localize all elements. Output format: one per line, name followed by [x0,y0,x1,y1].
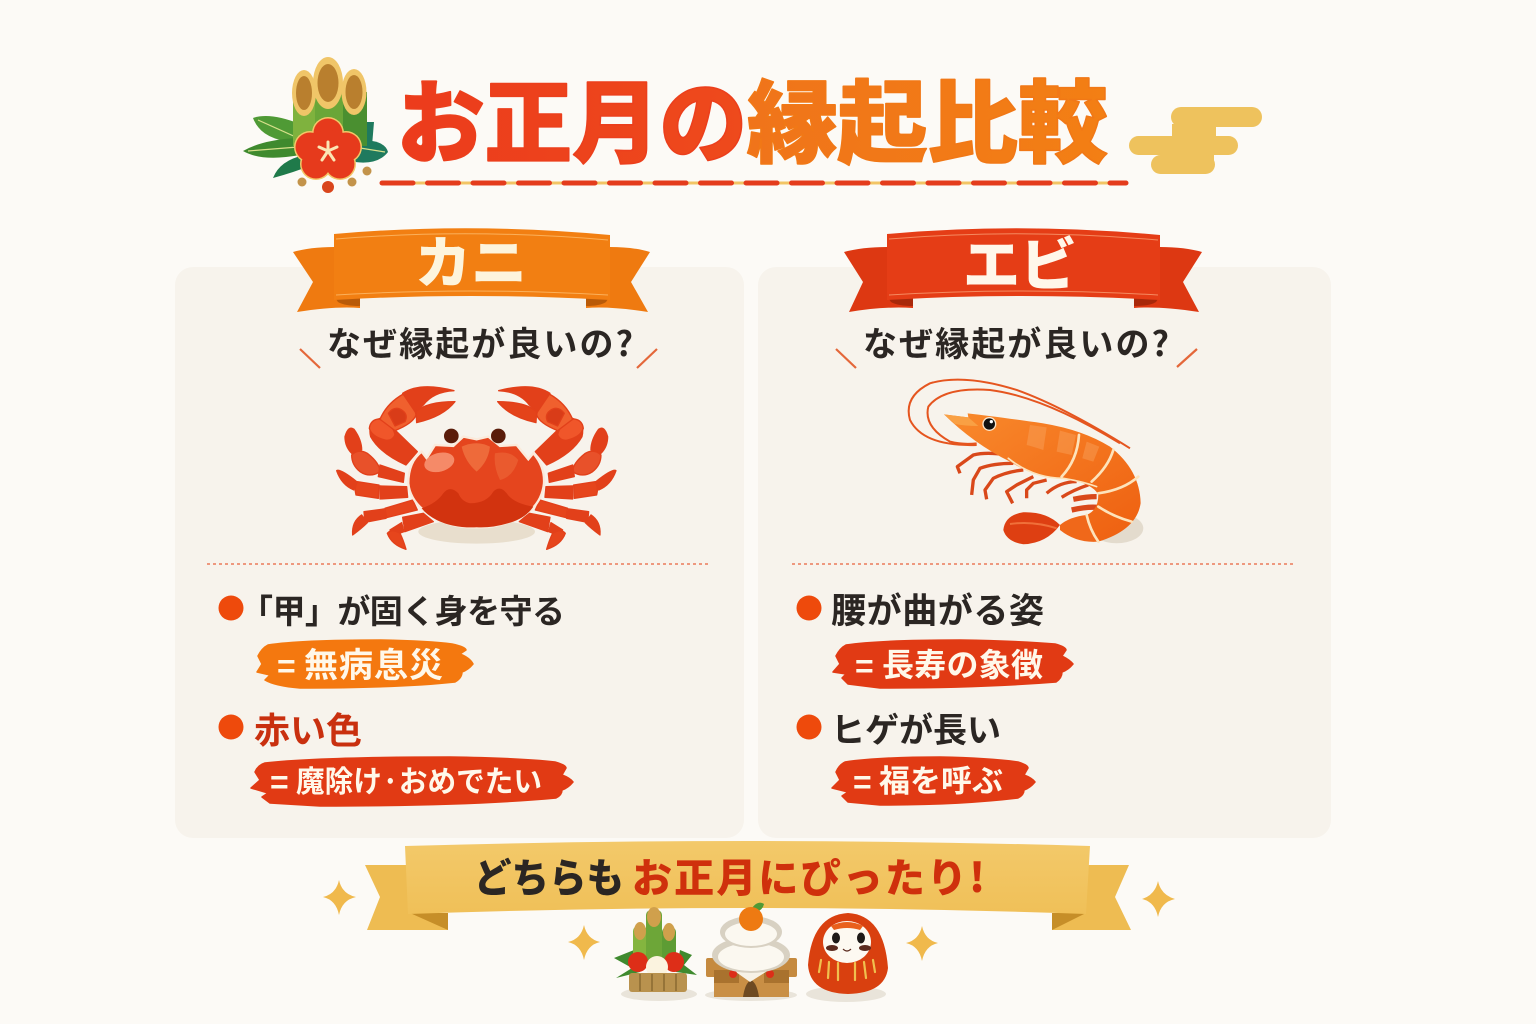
point: ヒゲが長い: ヒゲが長い [831,703,1001,752]
banner text: お正月にぴったり! [632,846,985,904]
badge: 長寿の象徴 [833,640,1073,688]
ribbon: カニ heading: カニ [415,219,527,300]
shrimp stripes [1008,435,1138,542]
badge: 無病息災 [257,638,473,688]
subheading: なぜ縁起が良いの？: なぜ縁起が良いの? [327,317,633,366]
panel: エビ [758,220,1331,838]
subheading: なぜ縁起が良いの？: なぜ縁起が良いの? [863,317,1169,366]
badge: 無病息災: = [277,648,296,684]
ribbon: エビ heading [844,220,1202,312]
badge: 魔除け・おめでたい: 魔除け·おめでたい [296,757,542,801]
point: 腰が曲がる姿: 腰が曲がる姿 [831,583,1044,634]
badge: 無病息災: 無病息災 [304,638,443,687]
ribbon: カニ heading [293,219,650,312]
title text: お正月の [397,51,747,181]
title underline [380,182,1126,184]
banner text: どちらも [474,846,624,904]
badge: 長寿の象徴: 長寿の象徴 [882,640,1043,686]
illustration: shrimp [909,380,1143,544]
badge: 福を呼ぶ [832,756,1035,805]
badge: 福を呼ぶ: 福を呼ぶ [879,756,1003,801]
crab left side limbs [337,387,455,549]
badge: 長寿の象徴: = [855,648,874,684]
icon: daruma [806,913,888,1002]
bottom banner [365,841,1131,930]
title text [397,51,1108,181]
ribbon: エビ heading: エビ [963,220,1077,302]
crab eyes [444,429,506,443]
shrimp antennae [909,380,1130,448]
icon: kadomatsu with plum flower [243,57,388,193]
badge: 福を呼ぶ: = [853,764,872,800]
point: 「甲」が固く身を守る: 「甲」が固く身を守る [240,585,565,633]
title text: 縁起比較 [747,51,1108,181]
icon: kagami mochi [705,903,797,1001]
illustration: crab [337,387,616,549]
banner text [474,846,985,904]
point: 赤い色: 赤い色 [254,702,362,754]
shrimp body [944,413,1141,542]
shrimp legs [957,453,1097,510]
badge: 魔除け・おめでたい: = [270,764,289,800]
panel: カニ [175,219,744,838]
icon: gold cloud [1129,107,1262,174]
title block [243,51,1262,193]
shrimp tail [1003,512,1098,544]
divider: カニ [207,563,711,565]
crab body [408,437,544,527]
icon: small kadomatsu [614,907,697,1001]
sparkles [323,880,1175,961]
shrimp eye [982,417,996,431]
divider: エビ [792,563,1296,565]
